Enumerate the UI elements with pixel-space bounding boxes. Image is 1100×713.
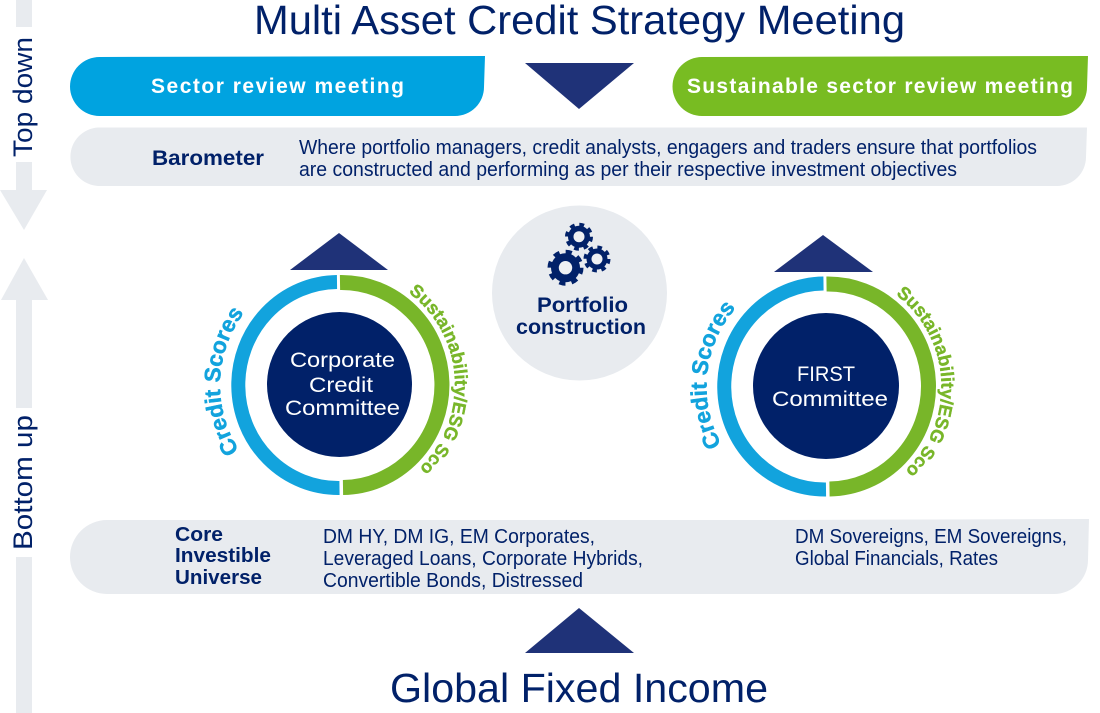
arrow: top down: Top down <box>8 37 38 157</box>
heading: core investible universe <box>175 524 271 589</box>
arrow: top down <box>0 0 47 230</box>
text: corporate universe: Leveraged Loans, Corporate Hybrids, <box>323 548 643 570</box>
heading: portfolio construction: Portfolio <box>537 294 628 317</box>
label: credit scores: Credit Scores <box>204 308 242 456</box>
heading: portfolio construction: construction <box>516 316 646 339</box>
panel: core investible universe <box>70 519 1089 594</box>
text: sovereign universe: Global Financials, Rates <box>795 548 998 570</box>
committee circle <box>267 312 412 457</box>
label: credit scores: Credit Scores <box>690 302 734 449</box>
label: sustainability score: Sustainability/ESG Sco <box>410 284 468 474</box>
diagram: corporate credit committee <box>204 233 468 495</box>
panel: portfolio construction <box>492 206 667 380</box>
arrow: bottom up <box>1 258 48 713</box>
committee circle: Credit <box>309 374 373 397</box>
label: sustainability score: Sustainability/ESG Sco <box>898 286 955 476</box>
diagram: first committee <box>690 235 955 496</box>
heading: portfolio construction <box>516 294 646 339</box>
heading: core investible universe: Investible <box>175 545 271 567</box>
heading: core investible universe: Universe <box>175 567 262 589</box>
panel: sustainable sector review meeting <box>673 56 1088 116</box>
arrow: up triangle <box>290 233 388 270</box>
icon: gears <box>550 225 608 283</box>
ring: credit scores <box>238 282 340 488</box>
arrow: up triangle <box>525 608 634 653</box>
panel: barometer <box>70 128 1087 186</box>
text: corporate universe: Convertible Bonds, Distressed <box>323 570 583 592</box>
arrow: up triangle <box>774 235 873 272</box>
ring: credit scores <box>724 284 826 490</box>
committee circle: FIRST <box>797 363 855 386</box>
text: barometer description: are constructed and performing as per their respective investment objectives <box>299 159 957 181</box>
text: barometer description: Where portfolio managers, credit analysts, engagers and traders ensure that portfolios <box>299 137 1037 159</box>
footer title: Global Fixed Income <box>390 665 768 711</box>
ring: sustainability <box>826 284 929 489</box>
committee circle: Corporate <box>290 349 395 372</box>
arrow: bottom up: Bottom up <box>8 415 38 550</box>
heading: barometer: Barometer <box>152 147 264 170</box>
ring: sustainability <box>340 282 442 488</box>
panel: sustainable sector review meeting: Sustainable sector review meeting <box>687 75 1073 98</box>
arrow: down triangle <box>525 63 634 109</box>
committee circle: Committee <box>285 397 400 420</box>
text: corporate universe <box>323 526 643 592</box>
committee circle: Committee <box>772 388 888 411</box>
committee circle <box>753 313 899 459</box>
text: sovereign universe <box>795 526 1067 570</box>
text: barometer description <box>299 137 1037 181</box>
text: corporate universe: DM HY, DM IG, EM Corporates, <box>323 526 595 548</box>
panel: sector review meeting: Sector review meeting <box>151 75 404 98</box>
text: sovereign universe: DM Sovereigns, EM Sovereigns, <box>795 526 1067 548</box>
panel: sector review meeting <box>70 56 485 116</box>
heading: core investible universe: Core <box>175 524 223 546</box>
